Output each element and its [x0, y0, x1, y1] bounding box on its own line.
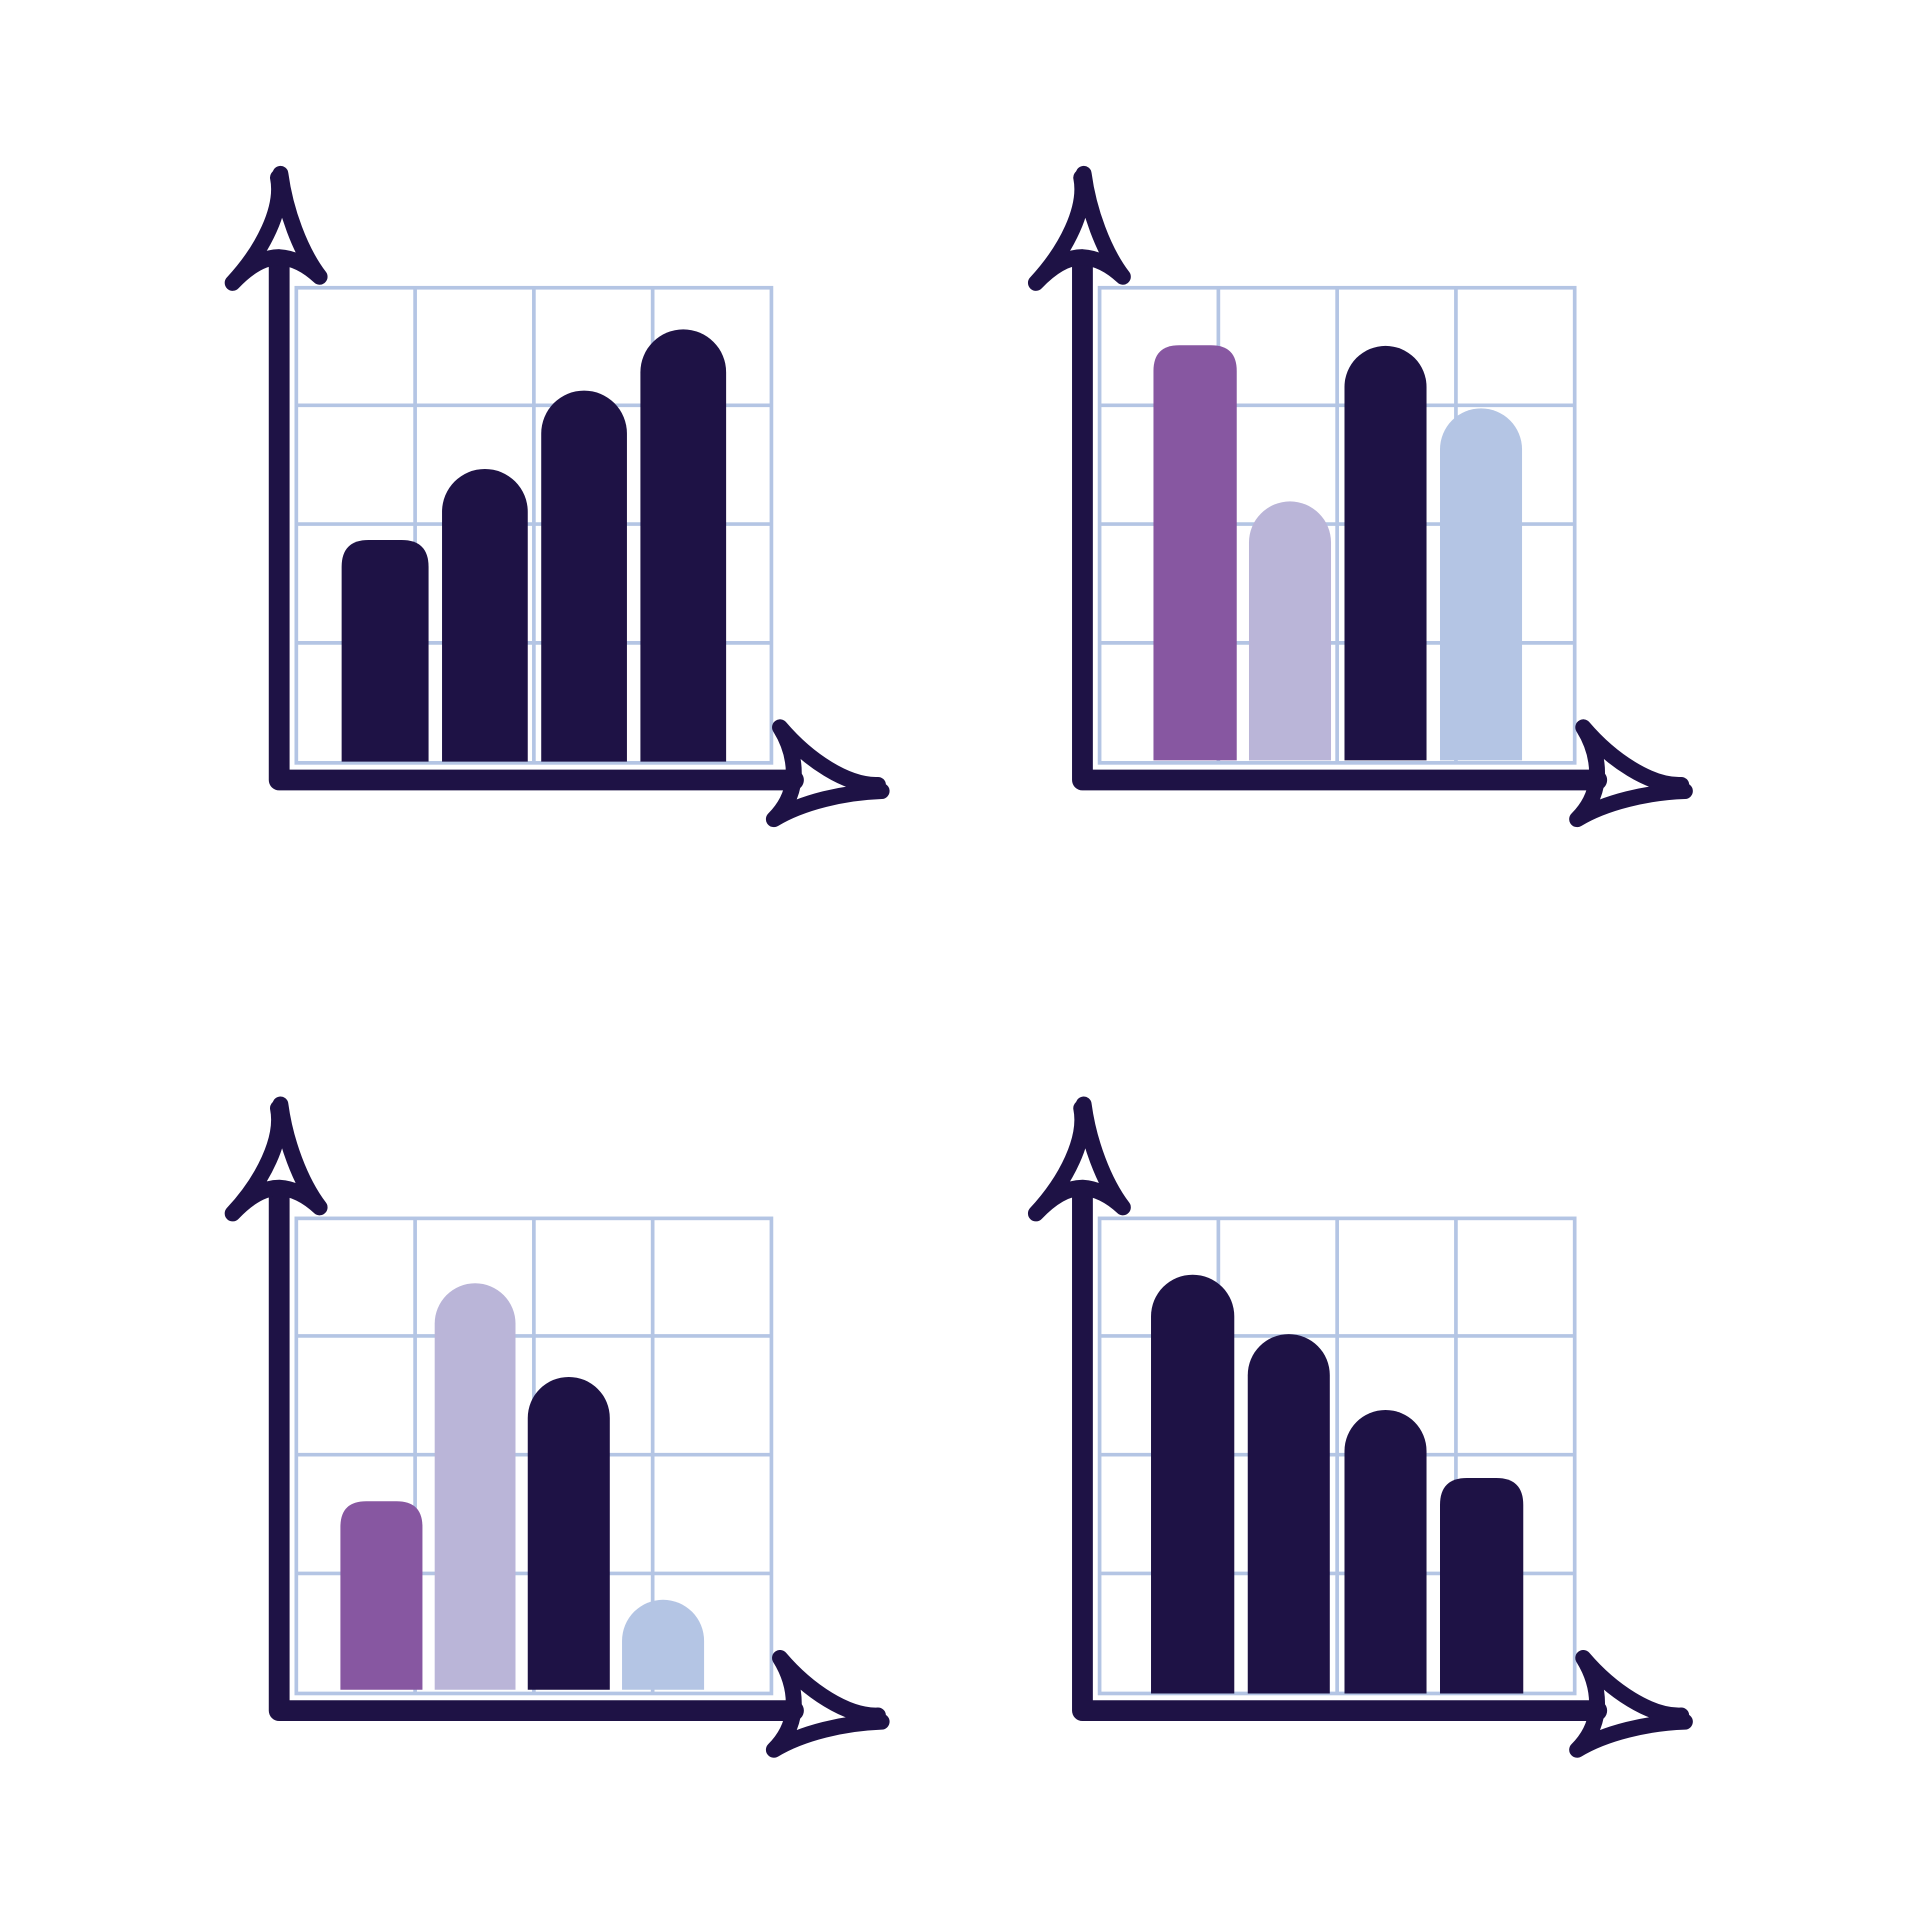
- chart: top-right colored bars: [1036, 174, 1685, 819]
- bars: [340, 1283, 704, 1690]
- axes with arrows: [233, 1104, 882, 1750]
- axes with arrows: [233, 174, 882, 819]
- bars: [1151, 1275, 1523, 1693]
- chart: bottom-left colored bars: [233, 1104, 882, 1750]
- axes with arrows: [1036, 174, 1685, 819]
- bars: [1153, 345, 1522, 760]
- bars: [342, 329, 726, 762]
- axes with arrows: [1036, 1104, 1685, 1750]
- chart: top-left increasing bars: [233, 174, 882, 819]
- chart: bottom-right decreasing bars: [1036, 1104, 1685, 1750]
